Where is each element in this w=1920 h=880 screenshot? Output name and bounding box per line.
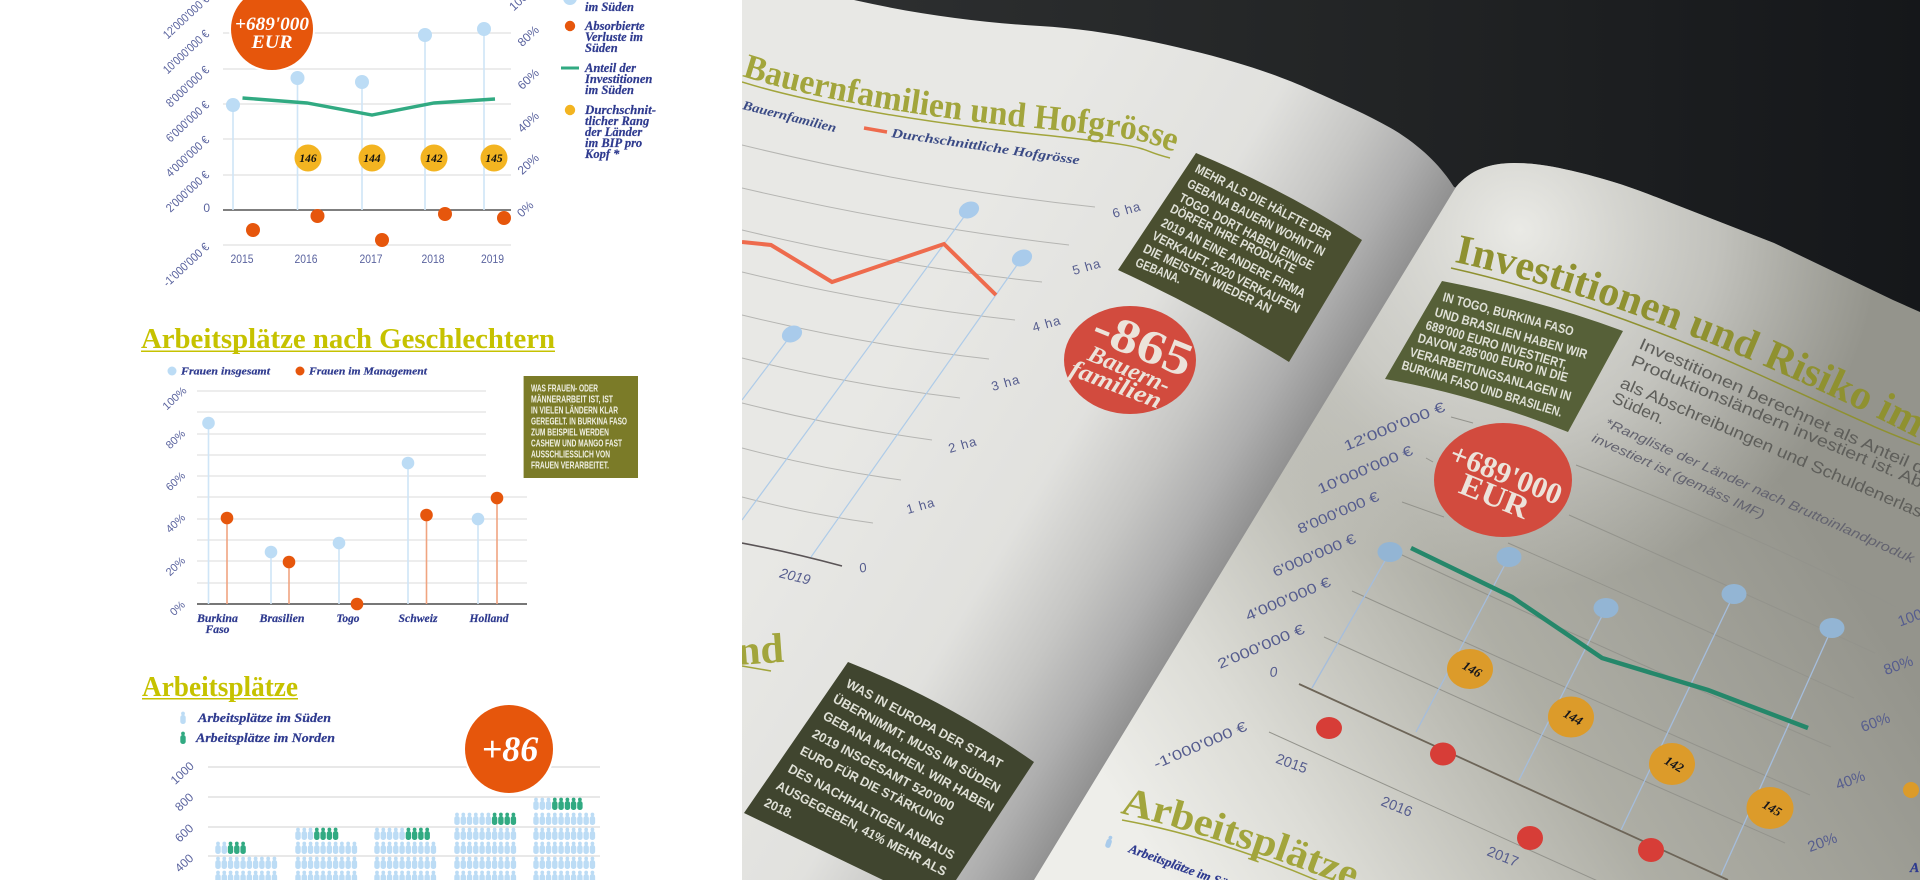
legend fragment: A [1909,861,1919,876]
left page legend: Durchschnittliche Hofgrösse [889,125,1081,167]
lower legend [1105,836,1228,880]
share line [1411,548,1808,728]
years: 2017 [1485,844,1520,871]
left page legend: Bauernfamilien [740,97,838,135]
percent axis: 20% [164,555,188,579]
rank badges: 146 [1460,658,1485,681]
intro paragraph: als Abschreibungen und Schuldenerlas [1617,374,1920,521]
rank badges [1447,649,1794,829]
years: 2017 [360,252,383,266]
y axis labels euro: 4'000'000 € [163,133,212,180]
olive text box: investments: UND BRASILIEN HABEN WIR [1433,304,1590,362]
legend: Absorbierte [584,19,645,33]
years [1273,751,1520,871]
callout box: FRAUEN VERARBEITET. [531,460,609,472]
olive text box: investments: IN TOGO, BURKINA FASO [1441,289,1575,339]
axis labels: 600 [172,821,197,845]
olive text box: Togo: MEHR ALS DIE HÄLFTE DER [1193,161,1334,243]
right brochure page [1034,163,1920,880]
panel: jobs by gender [141,323,638,636]
investment lollipops [226,22,491,210]
y axis labels percent: 60% [515,66,542,92]
rank badges: 145 [1760,797,1785,820]
callout bubble: +689'000 EUR: +689'000 [235,14,310,35]
olive text box: investments: DAVON 285'000 EURO IN DIE [1416,330,1570,385]
olive text box: Europe: AUSGEGEBEN, 41% MEHR ALS [774,778,949,879]
hectare axis labels: 4 ha [1031,312,1063,335]
olive text box: Togo: GEBANA. [1133,255,1184,286]
hectare axis labels [777,198,1143,588]
rank badges: 142 [1662,753,1687,776]
y axis labels euro: 8'000'000 € [163,63,212,110]
olive text box: Togo: VERKAUFT. 2020 VERKAUFEN [1150,228,1303,316]
intro paragraph: Produktionsländern investiert ist. Ab [1628,352,1920,492]
country labels: Brasilien [259,611,305,625]
partial heading: nd [735,626,785,675]
olive text box: Togo: DIE MEISTEN WIEDER AN [1141,241,1274,316]
olive text box: investments: BURKINA FASO UND BRASILIEN. [1400,357,1564,420]
country labels [196,611,509,636]
hectare axis labels: 6 ha [1111,198,1143,221]
women in management lollipops [221,492,503,610]
euro axis labels: 0 [1269,663,1278,680]
years: 2015 [230,252,254,266]
y axis labels euro: 0 [203,201,210,215]
percent axis labels: 20% [1805,830,1839,856]
callout bubble: +86: +86 [482,729,538,769]
rank badges: 142 [425,153,443,165]
panel: jobs [142,671,600,880]
legend: Süden [585,41,618,55]
hectare axis labels: 2019 [777,564,812,588]
hectare axis labels: 0 [857,559,869,576]
legend: der Länder [585,125,642,139]
farm size line [742,242,996,295]
legend: Anteil der [584,61,636,75]
callout bubble: +689'000 EUR: EUR [250,32,292,53]
olive text box: Togo: TOGO. DORT HABEN EINIGE [1177,190,1317,273]
hectare axis labels: 2 ha [947,433,979,456]
left page heading: Bauernfamilien und Hofgrösse [742,54,1177,151]
olive text box: investments: 689'000 EURO INVESTIERT, [1424,317,1569,372]
callout box: CASHEW UND MANGO FAST [531,438,622,450]
y axis labels percent: 0% [514,198,537,220]
years: 2015 [1273,751,1309,777]
olive text box: Europe: 2019 INSGESAMT 520'000 [810,726,957,814]
legend [180,711,335,745]
right page heading [1450,235,1920,446]
euro axis labels: 2'000'000 € [1215,621,1307,672]
olive text box: Togo: DÖRFER IHRE PRODUKTE [1168,201,1299,277]
callout box: GEREGELT. IN BURKINA FASO [531,416,627,428]
legend: Verluste im [585,30,643,44]
legend: Durchschnit- [584,103,656,117]
olive text box: investments [1385,281,1623,432]
percent axis: 0% [168,599,188,619]
hectare axis labels: 1 ha [905,494,937,517]
callout bubble: +689'000 EUR: +689'000 [1445,437,1567,512]
axis labels: 400 [172,851,197,875]
euro axis labels: 4'000'000 € [1243,573,1333,624]
intro paragraph [1609,335,1920,521]
legend: Arbeitsplätze im Süden [197,711,331,725]
legend: Kopf * [584,147,620,161]
euro axis labels [1151,398,1448,772]
country labels: Burkina [196,611,238,625]
pictogram columns [215,798,595,880]
olive text box: Europe: WAS IN EUROPA DER STAAT [844,676,1005,771]
legend: im Süden [585,0,634,14]
loss dots [1316,717,1664,862]
callout bubble: -865 Bauernfamilien: -865 [1085,300,1201,388]
legend [561,0,656,161]
callout box: WAS FRAUEN- ODER [531,384,598,394]
country labels: Faso [205,622,230,636]
lollipop stems and dots [742,198,1035,557]
callout box: IN VIELEN LÄNDERN KLAR [531,406,618,416]
absorbed losses dots [246,207,511,247]
hectare axis labels: 5 ha [1071,255,1103,278]
euro axis labels: 8'000'000 € [1295,488,1381,537]
heading: Arbeitsplätze nach Geschlechtern [141,323,555,355]
legend: Arbeitsplätze im Norden [195,731,335,745]
women total lollipops [202,417,484,604]
footnote [1590,415,1918,567]
legend: im BIP pro [585,136,642,150]
rank badges: 146 [299,153,317,165]
left page legend [742,101,1080,164]
callout bubble: +689'000 EUR: EUR [1455,465,1536,526]
olive text box: Europe: 2018. [762,795,796,821]
footnote: *Rangliste der Länder nach Bruttoinlandproduk [1603,415,1918,567]
legend: Frauen im Management [308,366,428,378]
callout box: MÄNNERARBEIT IST, IST [531,394,613,406]
years: 2016 [294,252,318,266]
callout box [524,376,638,478]
percent axis labels: 40% [1833,768,1867,794]
years: 2016 [1379,794,1414,821]
axis labels: 800 [172,790,197,814]
years [230,252,504,266]
country labels: Holland [469,611,509,625]
right page content [1105,235,1920,880]
axis labels [168,759,197,875]
euro axis labels: -1'000'000 € [1151,718,1249,772]
share line [242,98,495,115]
country labels: Togo [336,611,360,625]
percent axis labels: 80% [1881,653,1915,679]
y axis labels percent: 20% [515,151,542,177]
olive text box: Europe: DES NACHHALTIGEN ANBAUS [786,761,958,863]
legend fragment [1903,782,1919,876]
legend: Investitionen [584,72,652,86]
rank badges [294,144,508,172]
olive text box: Europe: ÜBERNIMMT, MUSS IM SÜDEN [831,691,1003,796]
right page grid [1268,416,1831,880]
olive text box: Togo [1118,153,1362,362]
percent axis: 40% [164,512,188,536]
callout bubble: -865 Bauernfamilien: Bauern- [1083,341,1174,399]
country labels: Schweiz [398,611,438,625]
left page chart: farming families and farm size [742,145,1143,588]
olive text box: Togo: GEBANA BAUERN WOHNT IN [1185,176,1328,259]
percent axis: 100% [161,385,189,413]
rank badges: 145 [485,153,503,165]
legend: tlicher Rang [585,114,649,128]
y axis labels euro: 2'000'000 € [163,168,212,215]
percent axis: 80% [164,428,188,452]
euro axis labels: 10'000'000 € [1315,442,1415,497]
intro paragraph: Süden. [1609,389,1668,428]
olive text box: Togo: 2019 AN EINE ANDERE FIRMA [1159,215,1309,301]
y axis labels euro: 10'000'000 € [160,27,212,77]
y axis labels euro [160,0,212,290]
y axis labels euro: -1'000'000 € [160,240,212,290]
hectare axis labels: 3 ha [990,371,1022,394]
euro axis labels: 6'000'000 € [1270,530,1358,580]
partial heading [742,632,784,672]
olive text box: investments: VERARBEITUNGSANLAGEN IN [1408,344,1573,404]
footnote: investiert ist (gemäss IMF) [1590,430,1767,522]
y axis labels percent [506,0,542,220]
euro axis labels: 12'000'000 € [1341,398,1448,454]
axis labels: 1000 [168,759,197,787]
olive text box: Europe [744,662,1034,880]
callout box: AUSSCHLIESSLICH VON [531,450,610,460]
rank badges: 144 [363,153,381,165]
years: 2019 [481,252,504,266]
heading: Arbeitsplätze [142,671,298,703]
percent axis: 60% [164,470,188,494]
olive text box: Europe: GEBANA MACHEN. WIR HABEN [821,708,997,815]
left brochure page [742,0,1480,880]
y axis labels percent: 80% [515,23,542,49]
legend: Frauen insgesamt [180,366,271,378]
y axis labels euro: 6'000'000 € [163,98,212,145]
callout bubble: +689'000 EUR [229,0,315,72]
callout bubble: -865 Bauernfamilien: familien [1066,356,1165,415]
olive text box: Europe: EURO FÜR DIE STÄRKUNG [798,743,947,829]
intro paragraph: Investitionen berechnet als Anteil d [1636,335,1920,478]
y axis labels percent: 40% [515,109,542,135]
legend [168,366,428,378]
percent axis labels [1805,601,1920,856]
percent axis [161,385,189,619]
stems and investment dots [1312,542,1844,875]
panel: brochure photograph [742,0,1920,880]
legend: im Süden [585,83,634,97]
years: 2018 [422,252,445,266]
panel: investment chart (left page scan) [160,0,656,290]
percent axis labels: 60% [1858,710,1892,736]
callout bubble: -865 Bauernfamilien [1064,300,1201,415]
rank badges: 144 [1561,706,1586,729]
callout bubble: +86 [463,703,555,795]
callout bubble: +689'000 EUR [1434,423,1572,537]
callout box: ZUM BEISPIEL WERDEN [531,428,609,438]
